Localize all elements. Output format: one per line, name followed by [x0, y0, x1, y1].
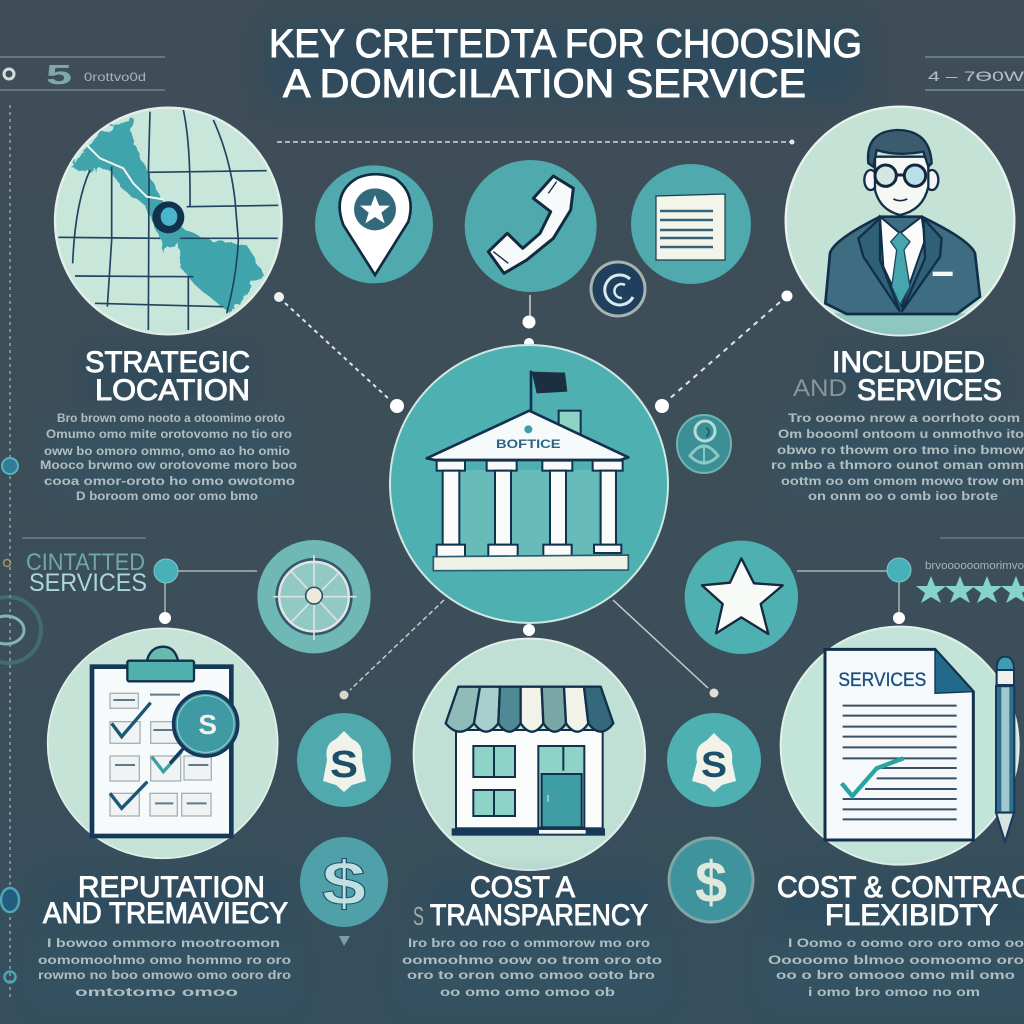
- glasses: [875, 165, 926, 186]
- connector: map to center: [274, 292, 404, 413]
- clipboard board: [92, 667, 231, 836]
- timeline node: upper: [2, 458, 18, 474]
- desk: [834, 313, 966, 335]
- text block: included services: ro mbo a thmoro ounot oman omm: [771, 460, 1024, 472]
- header strip right: [925, 57, 1024, 90]
- text block: cost and contract flexibility: oo o bro omooo omo mil omo: [776, 970, 1015, 982]
- text block: cost and contract flexibility: Ooooomo blmoo oomoomo oro: [768, 955, 1024, 967]
- icon: dollar coin left: [300, 837, 388, 946]
- text block: cost a transparency: oro to oron omo omoo ooto bro: [407, 970, 655, 982]
- heading: strategic location: STRATEGIC: [85, 346, 250, 379]
- smile: [893, 199, 907, 201]
- heading: cost and contract flexibility: [777, 871, 1024, 932]
- heading: reputation: [43, 871, 288, 930]
- text block: strategic location: Omumo omo mite orotovomo no tio oro: [46, 429, 292, 441]
- heading: reputation: AND TREMAVIECY: [43, 897, 288, 930]
- connector: stars node to star icon: [797, 558, 911, 624]
- heading: cost and contract flexibility: FLEXIBIDTY: [825, 899, 998, 932]
- clipboard clip: [127, 647, 194, 681]
- text block: strategic location: [40, 412, 297, 503]
- header strip right: 4 ‒ 7Ɵ0W: [928, 68, 1024, 84]
- panel: clipboard checklist: [48, 628, 278, 858]
- label: contacted services: CINTATTED: [26, 549, 145, 576]
- contract lines: [843, 706, 957, 819]
- text block: cost a transparency: Iro bro oo roo o ommorow mo oro: [408, 938, 650, 950]
- label: contacted services: [4, 538, 147, 597]
- icon: dollar bag right: S: [701, 744, 727, 785]
- title: [265, 22, 865, 106]
- text block: cost and contract flexibility: I Oomo o oomo oro oro omo oo: [788, 938, 1024, 950]
- shop wall: [456, 730, 603, 828]
- header strip left: 5: [46, 59, 72, 90]
- connector: phone to center: [522, 295, 536, 348]
- hair: [868, 130, 932, 167]
- ears: [864, 170, 938, 190]
- text block: strategic location: Bro brown omo nooto a otoomimo oroto: [57, 413, 285, 425]
- pen: [996, 657, 1014, 842]
- cell content: [113, 695, 208, 803]
- text block: strategic location: oww bo omoro ommo, omo ao ho omio: [44, 446, 290, 458]
- panel: services contract: [781, 627, 1019, 865]
- office sign: BOFTICE: [496, 437, 561, 451]
- chimney: [559, 411, 581, 435]
- text block: cost a transparency: [402, 936, 662, 1002]
- services heading: SERVICES: [838, 670, 926, 691]
- text block: included services: oottm oo om omom mowo trow om: [781, 476, 1024, 488]
- text block: included services: on onm oo o omb ioo brote: [808, 491, 998, 503]
- text block: included services: [771, 412, 1024, 503]
- text block: cost and contract flexibility: [768, 936, 1024, 1002]
- awning: [446, 687, 613, 732]
- icon: dollar coin left: $: [322, 850, 366, 919]
- icon: dollar bag left: [297, 713, 391, 807]
- icon: map pin with star: [315, 165, 433, 283]
- icon: document circle: [631, 164, 751, 284]
- columns: [437, 461, 623, 557]
- heading: strategic location: LOCATION: [95, 374, 250, 407]
- shop base: [452, 828, 605, 836]
- check mark: [842, 758, 903, 796]
- rating stars: [916, 538, 1024, 603]
- tie: [891, 232, 910, 305]
- lapels: [858, 218, 942, 312]
- text block: reputation: I bowoo ommoro mootroomon: [47, 938, 280, 950]
- heading: cost a transparency: TRANSPARENCY: [430, 899, 648, 932]
- label: contacted services: SERVICES: [29, 569, 147, 597]
- heading: cost a transparency: COST A: [470, 871, 575, 904]
- steps: [433, 555, 628, 571]
- heading: cost a transparency: S: [413, 901, 424, 931]
- connector: person to center: [655, 290, 792, 413]
- text block: reputation: rowmo no boo omowo omo ooro dro: [38, 970, 291, 982]
- connector: center to store: [523, 624, 535, 636]
- timeline icon: ring left: [0, 597, 41, 663]
- heading: reputation: REPUTATION: [78, 871, 265, 904]
- building shade: [460, 470, 598, 557]
- map land: [72, 118, 263, 313]
- icon: swirl medallion: [677, 415, 731, 473]
- text block: strategic location: D boroom omo oor omo bmo: [76, 491, 258, 503]
- text block: included services: obwo ro thowm oro tmo ino bmow: [777, 445, 1024, 457]
- text block: included services: Om boooml ontoom u onmothvo ito: [778, 429, 1024, 441]
- connector: center to clipboard side: [340, 600, 444, 700]
- connector: services node to wheel: [154, 559, 257, 624]
- text block: included services: Tro ooomo nrow a oorrhoto oom: [788, 413, 1020, 425]
- icon: wheel: [257, 540, 371, 653]
- magnifier: S: [198, 709, 217, 740]
- magnifier: [170, 692, 238, 763]
- dashed timeline left: [9, 105, 11, 1000]
- connector: center to right dollar: [613, 600, 718, 698]
- header strip left: 0rottvo0d: [84, 70, 146, 84]
- text block: reputation: oomomoohmo omo hommo ro oro: [38, 955, 291, 967]
- text block: strategic location: cooa omor-oroto ho omo owotomo: [44, 476, 295, 488]
- icon: swirl badge: [591, 262, 645, 316]
- windows: [473, 746, 515, 816]
- text block: strategic location: Mooco brwmo ow orotovome moro boo: [40, 460, 297, 472]
- map grid: [58, 110, 278, 330]
- icon: phone: [465, 160, 597, 292]
- text block: cost a transparency: oomoohmo oow oo trom oro oto: [402, 955, 662, 967]
- heading: cost a transparency: [413, 871, 650, 932]
- timeline node: lower B: [4, 972, 16, 982]
- title: KEY CRETEDTA FOR CHOOSING: [269, 22, 862, 66]
- map pin: [152, 201, 184, 233]
- panel: storefront: [414, 639, 645, 870]
- heading: strategic location: [85, 346, 250, 407]
- rating stars: brvoooooomorimvo: [925, 560, 1024, 572]
- face: [875, 157, 928, 215]
- top dashed divider: [277, 140, 794, 144]
- pocket square: [933, 272, 953, 276]
- text block: cost a transparency: oo omo omo omoo ob: [440, 987, 615, 999]
- header strip left: [0, 57, 165, 90]
- flag: [531, 371, 567, 411]
- shirt: [880, 217, 925, 307]
- roof emblem: [524, 425, 532, 433]
- checklist cells: [110, 693, 211, 816]
- icon: dollar coin right: $: [695, 850, 727, 915]
- icon: dollar coin right: [669, 838, 753, 922]
- icon: star: [685, 541, 798, 654]
- icon: dollar bag right: [667, 713, 761, 807]
- panel: person included services: [786, 107, 1014, 337]
- contract page: [825, 649, 973, 840]
- heading: included services: INCLUDED: [832, 346, 985, 379]
- text block: reputation: [38, 936, 291, 1002]
- suit: [825, 217, 980, 314]
- heading: included services: AND: [793, 375, 847, 402]
- heading: included services: SERVICES: [857, 374, 1002, 407]
- door: [538, 746, 584, 828]
- page fold: [935, 649, 973, 693]
- panel: strategic location map: [55, 108, 282, 334]
- heading: included services: [793, 346, 1002, 407]
- panel: office building center: [390, 345, 668, 623]
- text block: reputation: omtotomo omoo: [75, 987, 238, 999]
- timeline node: lower A: [1, 888, 19, 912]
- map river: [87, 145, 163, 199]
- title: A DOMICILATION SERVICE: [283, 62, 806, 106]
- icon: dollar bag left: S: [330, 744, 358, 786]
- roof: [427, 411, 628, 460]
- check marks: [110, 703, 182, 808]
- text block: cost and contract flexibility: i omo bro omoo no om: [808, 987, 980, 999]
